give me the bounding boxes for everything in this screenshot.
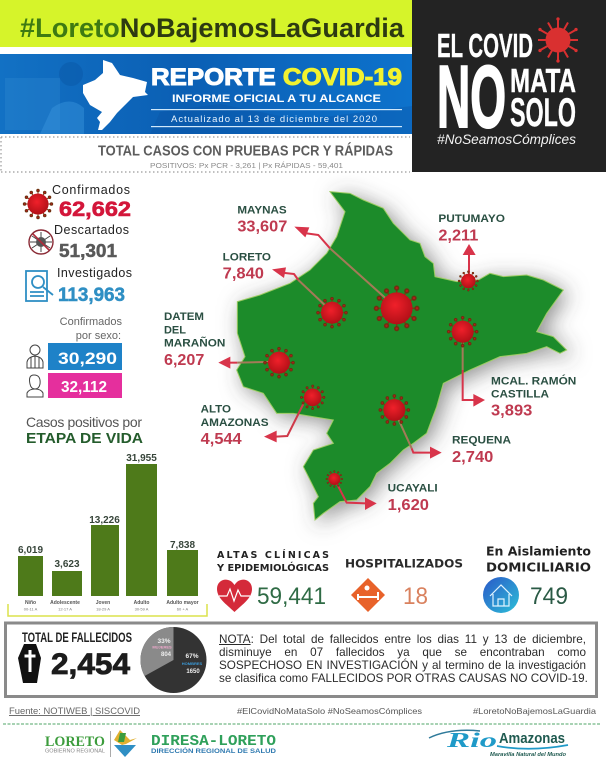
label: Requena: REQUENA xyxy=(452,434,511,446)
note text block xyxy=(219,633,588,685)
bar chart: Joven xyxy=(96,600,110,606)
pie chart: HOMBRES xyxy=(182,661,203,666)
label: Mcal. Ramón Castilla: 3,893 xyxy=(491,403,533,420)
arrow: Datem del Marañon xyxy=(218,357,278,369)
female count: 32,112 xyxy=(61,379,107,396)
chart heading: ETAPA DE VIDA xyxy=(26,430,143,447)
top hashtag banner xyxy=(0,0,412,47)
label: Putumayo xyxy=(438,213,505,245)
label: Datem del Marañon: 6,207 xyxy=(164,352,205,369)
logo: Diresa Loreto: DIRECCIÓN REGIONAL DE SALUD xyxy=(151,746,276,755)
icon: coffin xyxy=(18,644,41,683)
black campaign panel xyxy=(412,0,606,172)
icon: white Loreto map xyxy=(83,60,148,130)
confirmed by sex heading: Confirmados xyxy=(60,316,122,328)
logo: Rio Amazonas: Rio xyxy=(445,728,497,752)
label: Loreto: 7,840 xyxy=(223,266,264,283)
label: Alto Amazonas: 4,544 xyxy=(201,431,242,448)
panel: home isolation: En Aislamiento xyxy=(486,544,591,558)
icon: red virus xyxy=(538,18,578,62)
label: Requena xyxy=(452,434,511,466)
icon: confirmed virus xyxy=(23,189,53,219)
investigated xyxy=(57,266,132,306)
slogan: EL COVID xyxy=(437,27,533,64)
map shape xyxy=(237,192,567,520)
label: Alto Amazonas: ALTO xyxy=(201,404,231,416)
blue report header panel xyxy=(0,54,412,134)
label: Datem del Marañon xyxy=(164,311,225,369)
confirmed: Confirmados xyxy=(52,183,130,197)
panel: map of Loreto xyxy=(164,192,576,520)
label: Mcal. Ramón Castilla: MCAL. RAMÓN xyxy=(491,374,576,387)
pie chart: 1650 xyxy=(186,669,200,675)
bar chart: 13,226 xyxy=(89,515,120,526)
panel: home isolation xyxy=(483,544,591,613)
label: Ucayali xyxy=(388,483,438,514)
icon: house xyxy=(483,577,519,613)
value: isolation: 749 xyxy=(530,583,568,610)
panel: deaths xyxy=(6,623,596,696)
investigated: 113,963 xyxy=(58,285,125,306)
pie chart: MUJERES xyxy=(152,644,172,650)
label: Datem del Marañon: MARAÑON xyxy=(164,337,225,350)
bar chart: 18-29 A xyxy=(96,606,110,612)
confirmed: 62,662 xyxy=(59,198,131,221)
label: Maynas xyxy=(237,204,288,236)
label: Requena: 2,740 xyxy=(452,449,494,466)
bar chart: Adolescente xyxy=(50,600,80,606)
panel: hospitalized xyxy=(345,556,463,612)
icon: heart xyxy=(217,580,252,612)
bar chart: 7,838 xyxy=(170,540,195,551)
label: Ucayali: UCAYALI xyxy=(388,483,438,495)
campaign hashtag: #NoSeamosCómplices xyxy=(437,131,576,147)
report title: REPORTE COVID-19 xyxy=(151,64,402,91)
arrow: Maynas xyxy=(294,227,395,307)
logo: Gobierno Regional Loreto: LORETO xyxy=(45,734,105,750)
icon: regional crest xyxy=(114,730,137,757)
hashtag right: #LoretoNoBajemosLaGuardia xyxy=(473,706,596,716)
label: Datem del Marañon: DATEM xyxy=(164,311,204,323)
bar chart: 12-17 A xyxy=(58,606,72,612)
source: Fuente: NOTIWEB | SISCOVID xyxy=(9,706,140,717)
label: Loreto xyxy=(223,252,271,283)
panel: left statistics xyxy=(23,183,132,398)
report subtitle: INFORME OFICIAL A TU ALCANCE xyxy=(172,93,381,105)
note text block: se clasifica como FALLECIDOS POR OTRAS CAUSAS NO COVID-19. xyxy=(219,672,588,685)
label: Maynas: MAYNAS xyxy=(237,204,287,216)
confirmed by sex heading xyxy=(60,316,122,342)
panel: home isolation: DOMICILIARIO xyxy=(486,560,591,574)
logo: Diresa Loreto: DIRESA-LORETO xyxy=(151,733,276,750)
discarded: 51,301 xyxy=(59,240,117,261)
logo: Rio Amazonas: Maravilla Natural del Mundo xyxy=(490,752,567,758)
arrow: Loreto xyxy=(272,267,330,310)
confirmed xyxy=(52,183,131,221)
bar chart: 60 + A xyxy=(177,606,189,612)
male count: 30,290 xyxy=(58,349,117,368)
logo: Gobierno Regional Loreto xyxy=(45,730,137,757)
chart heading: Casos positivos por xyxy=(26,414,142,430)
icon: man xyxy=(27,345,43,368)
note text block: disminuye en 07 fallecidos ya que se encontraban como xyxy=(219,646,586,659)
icon: bed diamond xyxy=(351,578,385,612)
icon: discarded virus xyxy=(29,230,53,254)
panel: clinical discharges: ALTAS CLÍNICAS xyxy=(217,549,329,561)
note text block: NOTA: Del total de fallecidos entre los dias 11 y 13 de diciembre, xyxy=(219,633,586,646)
bar chart: 3,623 xyxy=(54,559,80,570)
pie chart xyxy=(140,627,206,693)
logo: Rio Amazonas: Amazonas xyxy=(499,730,565,747)
dotted box: total cases xyxy=(1,137,410,172)
label: Mcal. Ramón Castilla: CASTILLA xyxy=(491,389,549,401)
label: Alto Amazonas: AMAZONAS xyxy=(201,417,269,429)
label: Putumayo: 2,211 xyxy=(438,228,479,245)
panel: clinical discharges xyxy=(216,549,329,612)
confirmed by sex heading: por sexo: xyxy=(76,330,121,342)
icon: woman xyxy=(27,375,43,397)
bar chart: 00-11 A xyxy=(24,606,38,612)
bar chart: Niño xyxy=(25,600,36,606)
arrow: Mcal. Ramón Castilla xyxy=(463,333,485,407)
positives breakdown: POSITIVOS: Px PCR - 3,261 | Px RÁPIDAS - 59,401 xyxy=(150,161,343,170)
slogan: NO xyxy=(437,47,506,146)
arrow: Ucayali xyxy=(335,480,377,510)
female count xyxy=(48,373,122,398)
bar chart: Adulto xyxy=(134,600,149,606)
panel: cases by life stage xyxy=(8,414,207,616)
logo: Rio Amazonas xyxy=(429,728,568,758)
chart heading xyxy=(26,414,143,447)
banner hashtag text: #LoretoNoBajemosLaGuardia xyxy=(20,13,405,43)
label: Loreto: LORETO xyxy=(223,252,271,264)
male count xyxy=(48,343,122,370)
arrow: Alto Amazonas xyxy=(264,404,303,442)
discarded xyxy=(54,223,129,261)
note text block: SOSPECHOSO EN INVESTIGACIÓN y al termino de la investigación xyxy=(219,659,586,672)
bar chart: Adulto mayor xyxy=(166,600,199,606)
label: Datem del Marañon: DEL xyxy=(164,324,186,336)
label: Mcal. Ramón Castilla xyxy=(491,374,576,420)
deaths value: 2,454 xyxy=(51,648,130,681)
bar chart: 31,955 xyxy=(126,453,157,464)
arrow: Putumayo xyxy=(463,244,476,277)
logo: Gobierno Regional Loreto: GOBIERNO REGIONAL xyxy=(45,748,105,754)
bar chart: 6,019 xyxy=(18,545,43,556)
label: Alto Amazonas xyxy=(201,404,269,448)
update date: Actualizado al 13 de diciembre del 2020 xyxy=(171,114,377,125)
bar chart xyxy=(8,453,207,616)
value: hospitalized: 18 xyxy=(403,583,428,610)
deaths heading: TOTAL DE FALLECIDOS xyxy=(22,629,132,645)
slogan: MATA xyxy=(510,62,576,99)
label: Putumayo: PUTUMAYO xyxy=(438,213,505,225)
label: Ucayali: 1,620 xyxy=(388,497,429,514)
arrow: Requena xyxy=(395,412,442,459)
label: Maynas: 33,607 xyxy=(237,219,288,236)
investigated: Investigados xyxy=(57,266,132,280)
hashtags center: #ElCovidNoMataSolo #NoSeamosCómplices xyxy=(237,706,422,716)
value: discharges: 59,441 xyxy=(257,583,326,610)
pie chart: 33% xyxy=(157,638,171,645)
panel: clinical discharges: Y EPIDEMIOLÓGICAS xyxy=(216,562,329,574)
discarded: Descartados xyxy=(54,223,129,237)
panel: hospitalized: HOSPITALIZADOS xyxy=(345,556,463,570)
icon: document with magnifier xyxy=(26,271,53,301)
virus markers xyxy=(264,271,478,487)
total cases heading: TOTAL CASOS CON PRUEBAS PCR Y RÁPIDAS xyxy=(98,142,393,160)
pie chart: 67% xyxy=(185,653,199,660)
bar chart: 30-59 A xyxy=(135,606,149,612)
pie chart: 804 xyxy=(161,652,172,658)
